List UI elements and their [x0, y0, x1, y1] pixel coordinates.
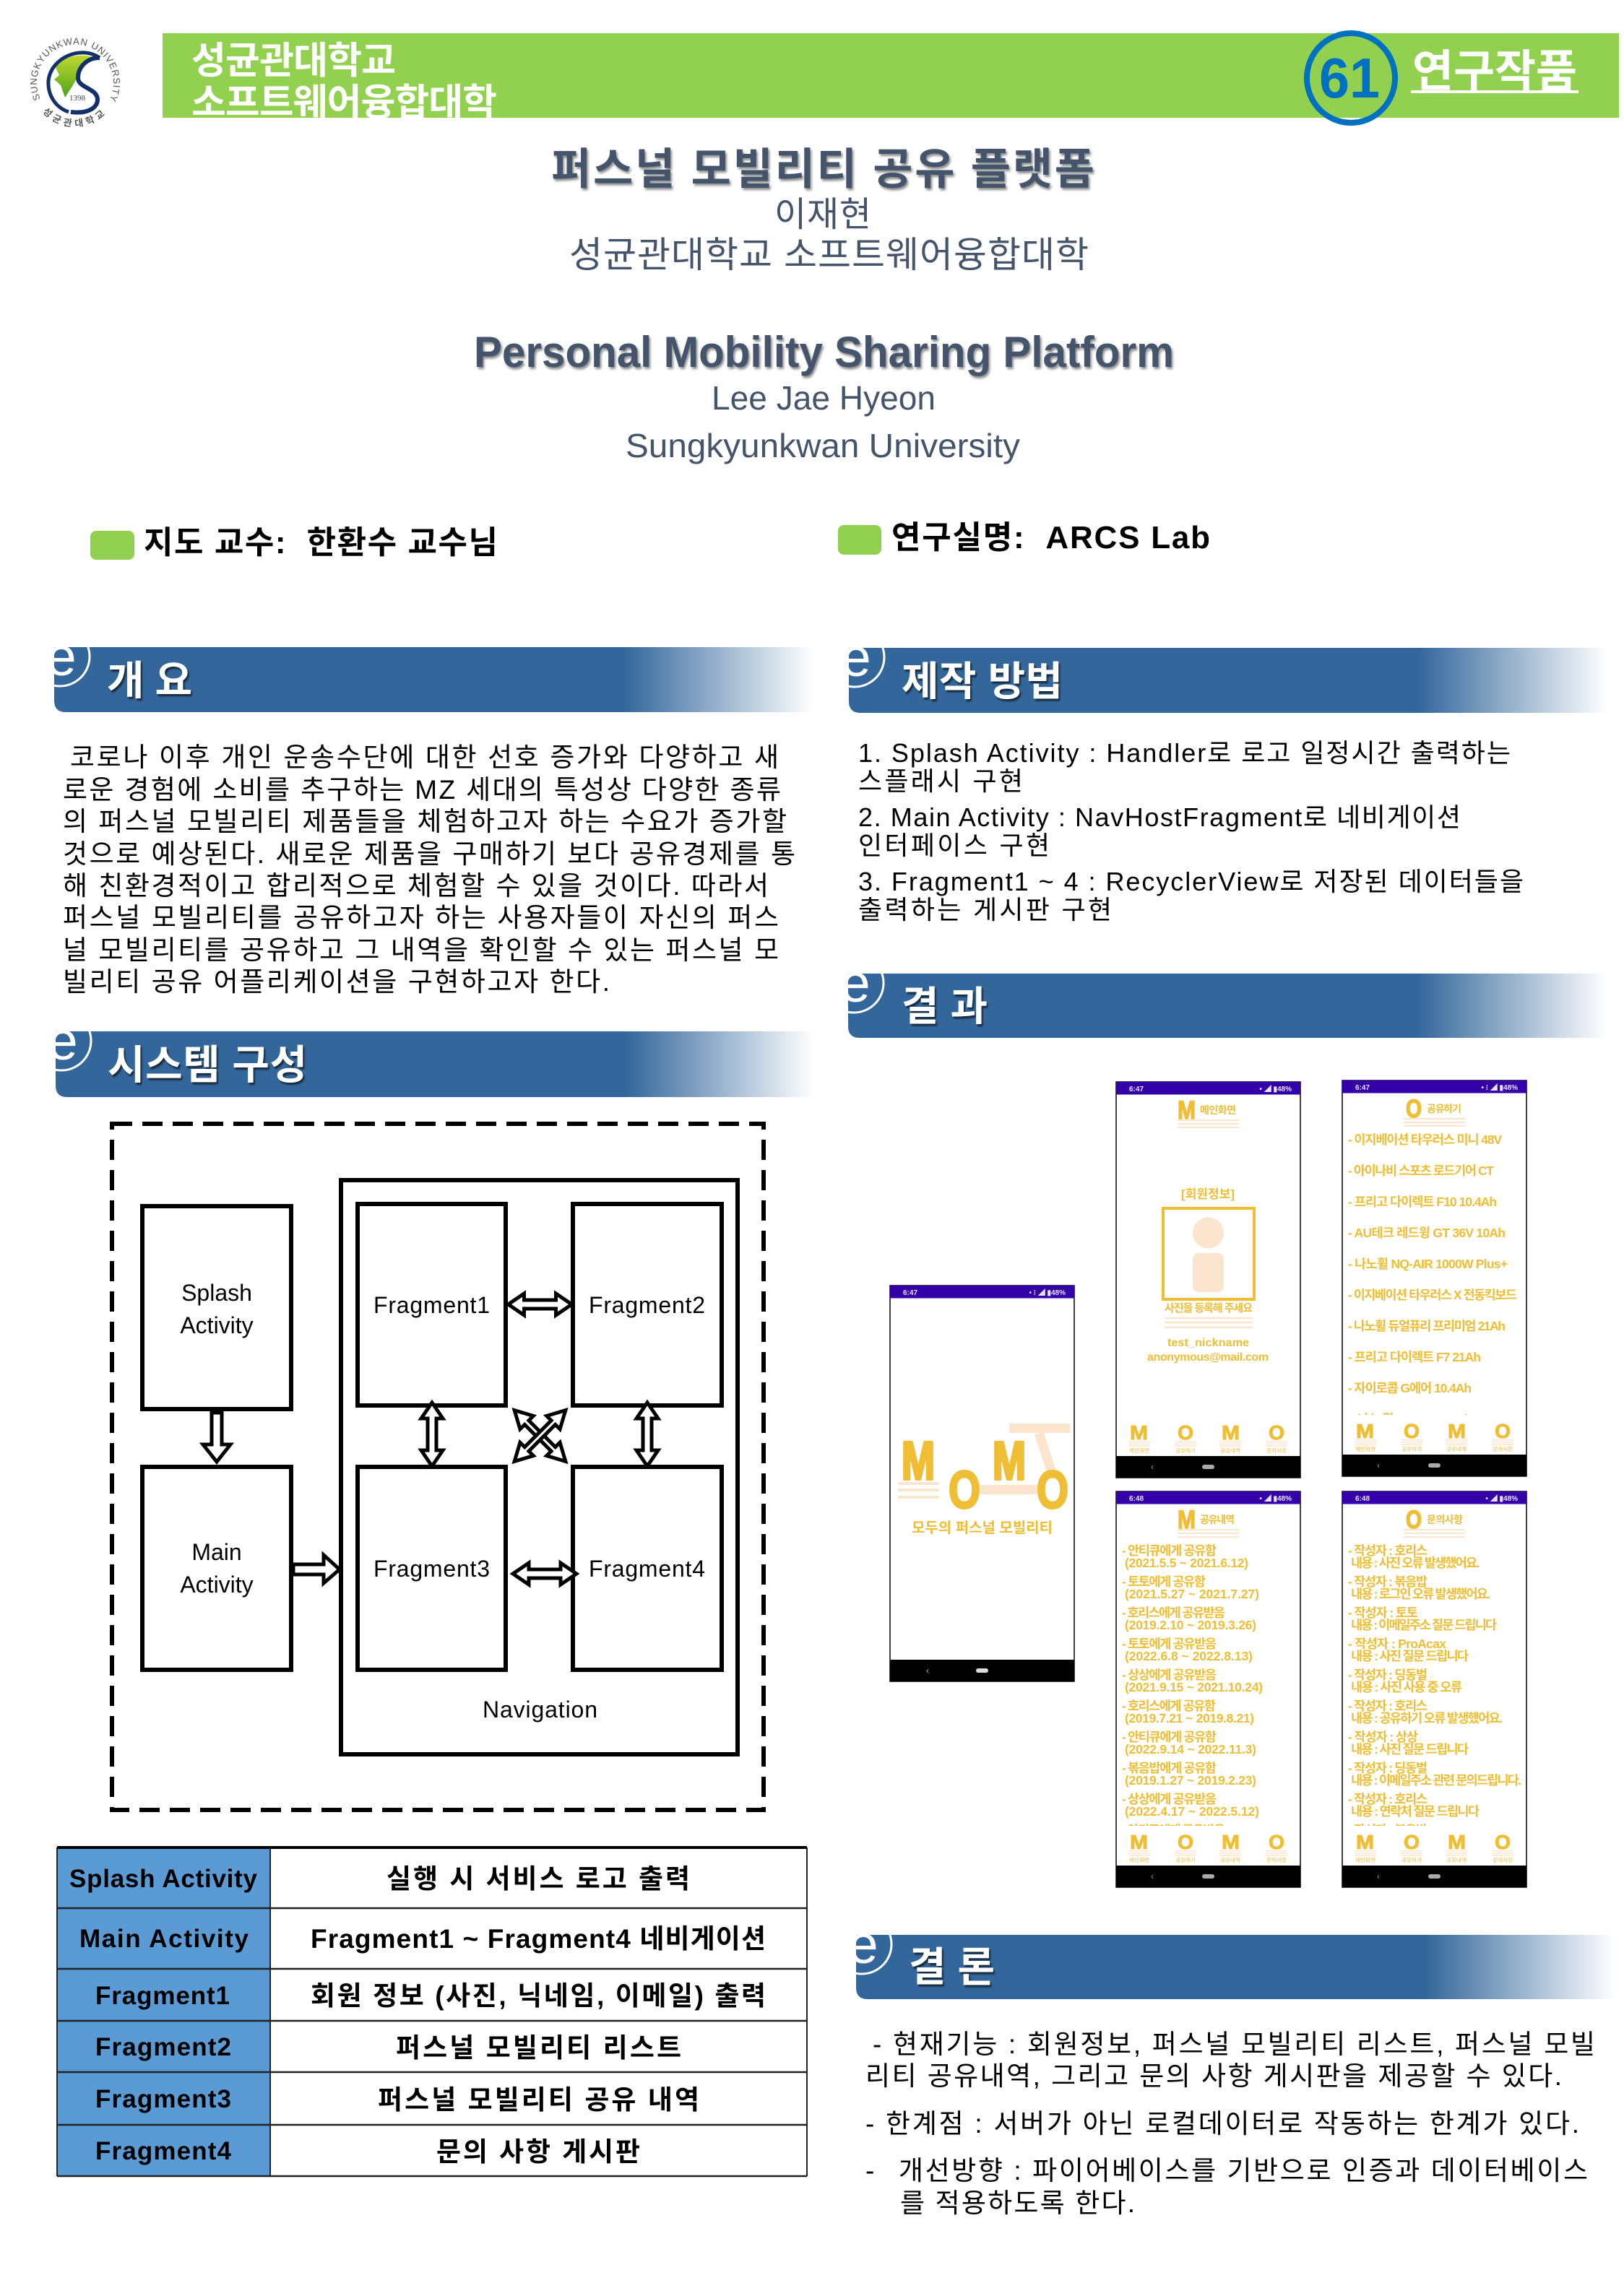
box: fragment2: Fragment2 [589, 1292, 705, 1318]
sharing history list: - 볶음밥에게 공유함 [1122, 1761, 1217, 1775]
scooter illustration logo: O [1037, 1461, 1068, 1520]
arrow: fragment1 and fragment3 [421, 1403, 443, 1466]
author English: Lee Jae Hyeon [712, 379, 936, 417]
row: main activity: Main Activity [79, 1925, 249, 1953]
navigation bar: ‹ [1151, 1871, 1154, 1881]
box: splash activity: Splash [181, 1280, 252, 1306]
bottom tab bar: 공유내역 [1446, 1445, 1467, 1452]
row: fragment2: Fragment2 [95, 2033, 231, 2061]
bottom tab bar: O [1404, 1420, 1420, 1442]
box: fragment3: Fragment3 [373, 1556, 490, 1582]
inquiry list [1348, 1543, 1521, 1837]
navigation bar [1342, 1455, 1526, 1476]
page header: 공유내역 [1200, 1514, 1235, 1525]
arrows: diagonal crossing [508, 1403, 572, 1468]
inquiry list: - 작성자 : 딩동벌 [1348, 1668, 1428, 1682]
text: conclusion: 리티 공유내역, 그리고 문의 사항 게시판을 제공할 수 있다. [865, 2061, 1562, 2091]
section header: overview: 개 요 [107, 658, 192, 703]
bottom tab bar: 문의사항 [1493, 1445, 1513, 1452]
page header [1404, 1095, 1465, 1126]
box: main activity: Activity [180, 1572, 254, 1598]
inquiry list: - 작성자 : ProAcax [1348, 1637, 1446, 1651]
sharing history list: (2022.4.17 ~ 2022.5.12) [1125, 1804, 1259, 1819]
bottom tab bar: 메인화면 [1355, 1445, 1375, 1452]
navigation bar [890, 1660, 1074, 1681]
section header: conclusion [832, 1914, 1615, 1999]
section header: system structure: e [48, 1010, 78, 1071]
text: overview: 것으로 예상된다. 새로운 제품을 구매하기 보다 공유경제를 통 [63, 839, 795, 869]
status bar: • ◢ ▮48% [1485, 1494, 1518, 1503]
mobility list: - 프리고 다이렉트 F10 10.4Ah [1348, 1195, 1497, 1209]
text: production method [858, 738, 1524, 924]
profile photo placeholder [1163, 1208, 1254, 1299]
scooter illustration logo [898, 1424, 1070, 1520]
text: conclusion: - 한계점 : 서버가 아닌 로컬데이터로 작동하는 한계가 있다. [865, 2109, 1579, 2139]
status bar: 6:48 [1129, 1495, 1144, 1503]
text: production method: 인터페이스 구현 [858, 831, 1050, 860]
navigation bar [1116, 1866, 1300, 1887]
logo: Sungkyunkwan University seal: 성균관대학교 [43, 108, 105, 127]
bottom tab bar: 공유하기 [1401, 1856, 1422, 1863]
box: fragment1 [358, 1204, 506, 1405]
section header: overview [30, 626, 813, 712]
college name [191, 40, 497, 124]
bottom tab bar [1128, 1831, 1287, 1863]
navigation bar: ‹ [926, 1665, 929, 1676]
sharing history list: - 호리스에게 공유함 [1122, 1699, 1216, 1713]
sharing history list [1122, 1543, 1263, 1837]
text: conclusion: - 현재기능 : 회원정보, 퍼스널 모빌리티 리스트, 퍼스널 모빌 [873, 2029, 1595, 2059]
navigation bar: ‹ [1377, 1460, 1380, 1470]
bottom tab bar: M [1448, 1831, 1466, 1853]
page header: 메인화면 [1200, 1104, 1236, 1116]
English title: Personal Mobility Sharing Platform [474, 328, 1174, 376]
logo: Sungkyunkwan University seal: SUNGKYUNKWAN UNIVERSITY [30, 38, 120, 103]
text: production method: 출력하는 게시판 구현 [858, 895, 1112, 924]
college name: 소프트웨어융합대학 [191, 82, 497, 124]
top banner [163, 33, 1619, 124]
inquiry list: 내용 : 사진 질문 드립니다 [1351, 1649, 1469, 1663]
page header [1178, 1506, 1239, 1537]
box: main activity [142, 1467, 291, 1670]
sharing history list: (2019.1.27 ~ 2019.2.23) [1125, 1773, 1256, 1788]
section header: system structure: 시스템 구성 [108, 1042, 307, 1088]
row: fragment4 [95, 2137, 640, 2167]
badge: number 61 [1307, 33, 1395, 123]
phone: inquiries screen [1342, 1491, 1526, 1887]
section header: results [824, 953, 1607, 1038]
inquiry list: 내용 : 사진 사용 중 오류 [1351, 1680, 1462, 1694]
status bar: 6:47 [1129, 1086, 1144, 1093]
inquiry list: - 작성자 : 호리스 [1348, 1699, 1428, 1713]
nickname and email [1147, 1337, 1269, 1364]
bottom tab bar: 메인화면 [1129, 1856, 1149, 1863]
text: production method: 스플래시 구현 [858, 766, 1023, 796]
text: conclusion: - [865, 2156, 874, 2185]
mobility list: - 이지베이션 타우러스 미니 48V [1348, 1132, 1502, 1147]
logo: Sungkyunkwan University seal [30, 38, 120, 127]
section header: production method: 제작 방법 [902, 659, 1063, 704]
row: main activity [79, 1924, 766, 1954]
sharing history list: - 호리스에게 공유받음 [1122, 1606, 1225, 1620]
lab: 연구실명: ARCS Lab [891, 520, 1210, 555]
page header: 공유하기 [1427, 1103, 1461, 1114]
badge: number 61: 61 [1319, 46, 1380, 110]
navigation container: Navigation [483, 1697, 597, 1723]
author Korean: 이재현 [774, 196, 871, 234]
status bar [1342, 1080, 1526, 1093]
box: fragment4: Fragment4 [589, 1556, 705, 1582]
bottom tab bar: O [1269, 1421, 1284, 1444]
mobility list: - 자이로콥 G에어 10.4Ah [1348, 1381, 1472, 1395]
phone: mobility list screen [1342, 1080, 1526, 1476]
row: fragment3: Fragment3 [95, 2085, 231, 2113]
arrow: fragment3 and fragment4 [513, 1563, 576, 1585]
bottom tab bar: M [1130, 1831, 1148, 1853]
mobility list: - 이지베이션 타우러스 X 전동킥보드 [1348, 1288, 1517, 1302]
page header [1178, 1096, 1239, 1127]
inquiry list: - 작성자 : 딩동벌 [1348, 1761, 1428, 1775]
sharing history list: - 안티큐에게 공유함 [1122, 1543, 1217, 1558]
system architecture diagram [112, 1124, 764, 1810]
slogan: 모두의 퍼스널 모빌리티 [912, 1520, 1053, 1536]
bottom tab bar: M [1222, 1421, 1240, 1444]
section header: production method [825, 627, 1607, 713]
bottom tab bar: 공유하기 [1175, 1856, 1196, 1863]
bottom tab bar: O [1269, 1831, 1284, 1853]
advisor: 지도 교수: 한환수 교수님 [144, 525, 498, 560]
bottom tab bar: O [1178, 1831, 1193, 1853]
status bar [1342, 1491, 1526, 1504]
status bar: 6:47 [903, 1289, 917, 1297]
photo hint: 사진을 등록해 주세요 [1165, 1302, 1253, 1314]
sharing history list: - 안티큐에게 공유받음 [1122, 1823, 1225, 1837]
box: splash activity [142, 1206, 291, 1409]
box: fragment2 [573, 1204, 722, 1405]
scooter illustration logo: M [902, 1431, 935, 1491]
text: conclusion: 를 적용하도록 한다. [900, 2188, 1135, 2218]
section header: results: e [840, 953, 871, 1013]
mobility list: - AU테크 레드윙 GT 36V 10Ah [1348, 1226, 1506, 1240]
page header: 문의사항 [1427, 1514, 1463, 1525]
sharing history list: - 상상에게 공유받음 [1122, 1792, 1217, 1806]
box: main activity: Main [191, 1539, 242, 1565]
page header: O [1406, 1506, 1422, 1534]
section header: production method: e [841, 627, 871, 688]
row: fragment1: Fragment1 [95, 1982, 230, 2010]
text: overview: 빌리티 공유 어플리케이션을 구현하고자 한다. [63, 967, 610, 997]
sharing history list: (2021.5.27 ~ 2021.7.27) [1125, 1587, 1259, 1601]
status bar [1116, 1491, 1300, 1504]
bottom tab bar: 메인화면 [1129, 1447, 1149, 1454]
mobility list: - 아이나비 스포츠 로드기어 CT [1348, 1164, 1494, 1178]
navigation bar: ‹ [1151, 1462, 1154, 1472]
status bar [1116, 1082, 1300, 1095]
college name: 성균관대학교 [191, 40, 396, 82]
bottom tab bar [1355, 1831, 1513, 1863]
phone: sharing history screen [1116, 1491, 1300, 1887]
sharing history list: - 토토에게 공유받음 [1122, 1637, 1217, 1651]
page header [1404, 1506, 1465, 1537]
inquiry list: - 작성자 : 토토 [1348, 1606, 1418, 1620]
text: overview: 의 퍼스널 모빌리티 제품들을 체험하고자 하는 수요가 증가할 [63, 807, 787, 836]
status bar: • ⁝ ◢ ▮48% [1481, 1083, 1518, 1092]
bottom tab bar [1355, 1420, 1513, 1452]
bottom tab bar [1128, 1421, 1287, 1454]
arrow: main to navigation [293, 1555, 340, 1583]
bottom tab bar: 문의사항 [1493, 1856, 1513, 1863]
row: fragment2: 퍼스널 모빌리티 리스트 [396, 2033, 681, 2063]
bottom tab bar: 공유내역 [1220, 1856, 1240, 1863]
bottom tab bar: O [1495, 1420, 1511, 1442]
text: conclusion [865, 2029, 1595, 2218]
row: fragment4: 문의 사항 게시판 [436, 2137, 640, 2167]
arrow: fragment2 and fragment4 [636, 1403, 658, 1466]
status bar [890, 1286, 1074, 1299]
page header: M [1178, 1096, 1196, 1125]
text: production method: 3. Fragment1 ~ 4 : RecyclerView로 저장된 데이터들을 [858, 867, 1524, 896]
box: fragment3 [358, 1467, 506, 1670]
text: production method: 2. Main Activity : NavHostFragment로 네비게이션 [858, 802, 1461, 832]
status bar: 6:48 [1355, 1495, 1370, 1503]
row: fragment3 [95, 2085, 699, 2115]
affiliation English: Sungkyunkwan University [626, 427, 1020, 464]
inquiry list: 내용 : 공유하기 오류 발생했어요. [1351, 1711, 1503, 1725]
affiliation Korean: 성균관대학교 소프트웨어융합대학 [569, 235, 1089, 275]
text: production method: 1. Splash Activity : Handler로 로고 일정시간 출력하는 [858, 738, 1511, 768]
bottom tab bar: 메인화면 [1355, 1856, 1375, 1863]
row: fragment1: 회원 정보 (사진, 닉네임, 이메일) 출력 [311, 1981, 766, 2011]
label: research work: 연구작품 [1412, 47, 1577, 97]
sharing history list: (2021.9.15 ~ 2021.10.24) [1125, 1680, 1263, 1694]
section header: conclusion: 결 론 [909, 1944, 995, 1990]
sharing history list: (2019.2.10 ~ 2019.3.26) [1125, 1618, 1256, 1632]
mobility list: - 나노휠 듀얼퓨리 프리미엄 21Ah [1348, 1319, 1506, 1333]
bottom tab bar: 공유내역 [1446, 1856, 1467, 1863]
phone: main screen [1116, 1082, 1300, 1478]
inquiry list: - 작성자 : 호리스 [1348, 1543, 1428, 1558]
mobility list: - 나노휠 NQ-S 21Ah [1348, 1412, 1472, 1426]
bottom tab bar: M [1356, 1831, 1374, 1853]
row: splash activity [69, 1864, 690, 1894]
mobility list: - 나노휠 NQ-AIR 1000W Plus+ [1348, 1257, 1508, 1271]
inquiry list: 내용 : 연락처 질문 드립니다 [1351, 1804, 1480, 1819]
row: main activity: Fragment1 ~ Fragment4 네비게이션 [311, 1924, 766, 1954]
bottom tab bar: M [1356, 1420, 1374, 1442]
nickname and email: anonymous@mail.com [1147, 1351, 1269, 1364]
sharing history list: (2019.7.21 ~ 2019.8.21) [1125, 1711, 1254, 1725]
photo hint [1165, 1302, 1253, 1327]
member info heading: [회원정보] [1181, 1187, 1235, 1201]
text: overview: 로운 경험에 소비를 추구하는 MZ 세대의 특성상 다양한 종류 [63, 775, 781, 805]
box: fragment4 [573, 1467, 722, 1670]
page header: M [1178, 1506, 1196, 1534]
navigation container [341, 1180, 738, 1754]
inquiry list: 내용 : 로그인 오류 발생했어요. [1351, 1587, 1490, 1601]
sharing history list: - 토토에게 공유함 [1122, 1574, 1206, 1589]
inquiry list: - 작성자 : 볶음밥 [1348, 1823, 1428, 1837]
sharing history list: - 상상에게 공유받음 [1122, 1668, 1217, 1682]
bottom tab bar: O [1495, 1831, 1511, 1853]
inquiry list: 내용 : 이메일주소 관련 문의드립니다. [1351, 1773, 1521, 1788]
status bar: • ◢ ▮48% [1259, 1085, 1292, 1093]
nickname and email: test_nickname [1167, 1337, 1249, 1349]
bottom tab bar: 문의사항 [1266, 1447, 1287, 1454]
row: fragment2 [95, 2033, 681, 2063]
bottom tab bar: M [1222, 1831, 1240, 1853]
row: fragment3: 퍼스널 모빌리티 공유 내역 [378, 2085, 699, 2115]
text: overview: 퍼스널 모빌리티를 공유하고자 하는 사용자들이 자신의 퍼스 [63, 903, 779, 932]
row: fragment4: Fragment4 [95, 2137, 232, 2165]
navigation bar [1116, 1456, 1300, 1478]
bottom tab bar: O [1404, 1831, 1420, 1853]
logo: Sungkyunkwan University seal: 1398 [69, 94, 85, 103]
text: overview: 코로나 이후 개인 운송수단에 대한 선호 증가와 다양하고 새 [70, 742, 779, 772]
sharing history list: - 안티큐에게 공유함 [1122, 1730, 1217, 1744]
box: fragment1: Fragment1 [373, 1292, 490, 1318]
inquiry list: - 작성자 : 상상 [1348, 1730, 1418, 1744]
row: fragment1 [95, 1981, 766, 2011]
status bar: • ◢ ▮48% [1259, 1494, 1292, 1503]
scooter illustration logo: M [993, 1431, 1026, 1491]
phone: splash screen [890, 1286, 1074, 1681]
sharing history list: (2022.9.14 ~ 2022.11.3) [1125, 1742, 1256, 1756]
section header: results: 결 과 [902, 984, 988, 1029]
navigation bar: ‹ [1377, 1871, 1380, 1881]
sharing history list: (2021.5.5 ~ 2021.6.12) [1125, 1556, 1248, 1570]
page header: O [1406, 1095, 1422, 1123]
inquiry list: - 작성자 : 호리스 [1348, 1792, 1428, 1806]
mobility list [1348, 1132, 1517, 1426]
arrow: splash to main [203, 1413, 230, 1462]
bottom tab bar: 공유내역 [1220, 1447, 1240, 1454]
table: component descriptions [57, 1847, 807, 2176]
status bar: 6:47 [1355, 1084, 1370, 1092]
bottom tab bar: 공유하기 [1401, 1445, 1422, 1452]
bottom tab bar: O [1178, 1421, 1193, 1444]
bottom tab bar: 문의사항 [1266, 1856, 1287, 1863]
text: overview: 널 모빌리티를 공유하고 그 내역을 확인할 수 있는 퍼스널 모 [63, 935, 779, 965]
text: overview: 해 친환경적이고 합리적으로 체험할 수 있을 것이다. 따라서 [63, 871, 769, 901]
section header: system structure [32, 1010, 814, 1097]
inquiry list: 내용 : 사진 오류 발생했어요. [1351, 1556, 1480, 1570]
arrow: fragment1 and fragment2 [509, 1294, 572, 1315]
row: splash activity: 실행 시 서비스 로고 출력 [386, 1864, 690, 1894]
text: overview [63, 742, 795, 997]
navigation bar [1342, 1866, 1526, 1887]
section header: overview: e [46, 626, 77, 687]
sharing history list: (2022.6.8 ~ 2022.8.13) [1125, 1649, 1253, 1663]
status bar: • ⁝ ◢ ▮48% [1029, 1288, 1066, 1297]
section header: conclusion: e [848, 1914, 878, 1975]
bottom tab bar: M [1130, 1421, 1148, 1444]
inquiry list: 내용 : 사진 질문 드립니다 [1351, 1742, 1469, 1756]
mobility list: - 프리고 다이렉트 F7 21Ah [1348, 1350, 1481, 1364]
box: splash activity: Activity [180, 1312, 254, 1338]
Korean title: 퍼스널 모빌리티 공유 플랫폼 [551, 145, 1094, 194]
bottom tab bar: 공유하기 [1175, 1447, 1196, 1454]
bottom tab bar: M [1448, 1420, 1466, 1442]
inquiry list: 내용 : 이메일주소 질문 드립니다 [1351, 1618, 1497, 1632]
inquiry list: - 작성자 : 볶음밥 [1348, 1574, 1428, 1589]
text: conclusion: 개선방향 : 파이어베이스를 기반으로 인증과 데이터베이스 [899, 2156, 1588, 2185]
scooter illustration logo: O [949, 1461, 980, 1520]
row: splash activity: Splash Activity [69, 1865, 258, 1893]
